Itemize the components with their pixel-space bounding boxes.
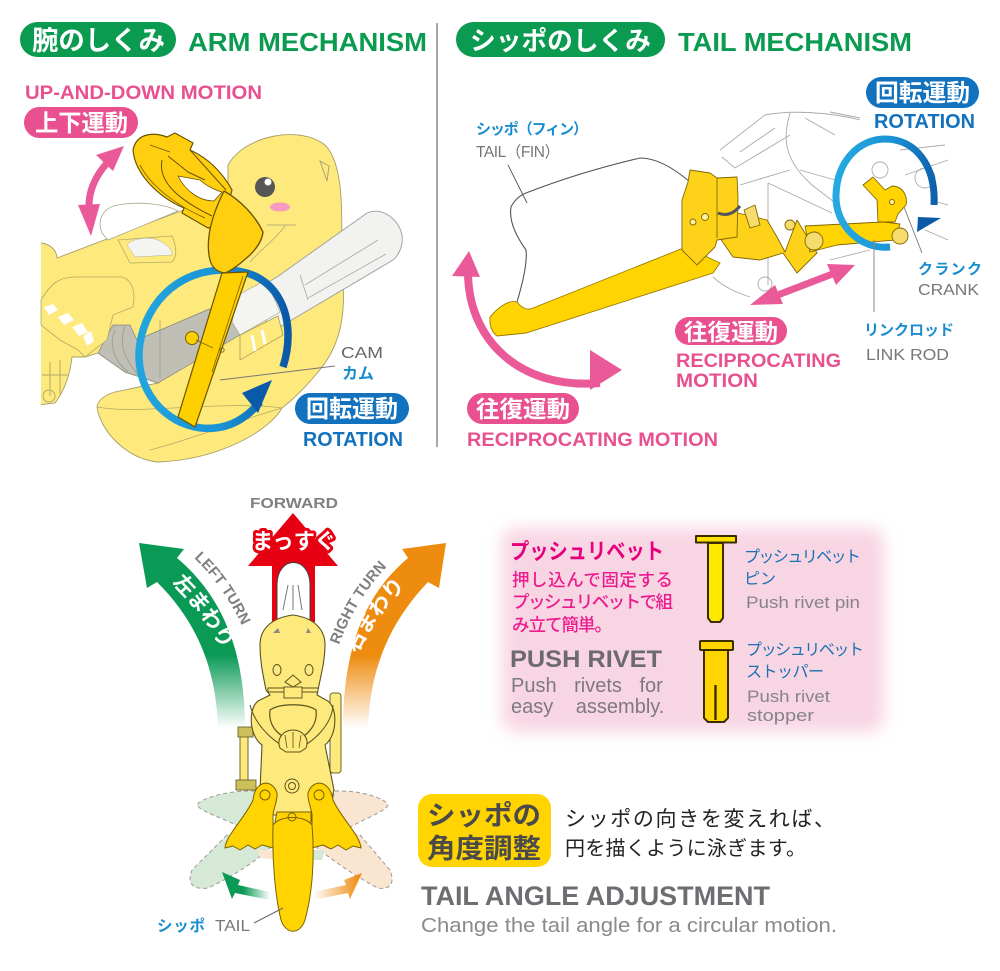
text: push rivet japanese: 押し込んで固定する	[512, 570, 673, 590]
label: crank: クランク	[918, 261, 982, 278]
text: push rivet japanese: プッシュリベットで組	[512, 592, 673, 612]
label: up and down motion	[24, 83, 262, 138]
arrow: tail left	[222, 872, 270, 900]
heading: arm mechanism: 腕のしくみ	[32, 26, 165, 56]
label: rotation: ROTATION	[874, 111, 975, 133]
arrow: forward: まっすぐ	[252, 529, 336, 554]
arrow: tail reciprocating motion	[452, 251, 622, 390]
label: rotation: 回転運動	[875, 80, 970, 107]
label: push rivet pin	[744, 548, 861, 612]
label: rotation	[295, 393, 409, 451]
label: tail fin	[476, 121, 588, 203]
panel: arm mechanism	[0, 22, 427, 462]
label: cam: カム	[342, 365, 374, 383]
label: tail: シッポ	[157, 917, 205, 935]
heading: arm mechanism	[20, 22, 427, 57]
panel: push rivet	[502, 528, 884, 732]
arrow: left turn: 左まわり	[173, 574, 232, 644]
icon: push rivet stopper	[700, 641, 733, 722]
arrow: left turn	[139, 543, 251, 726]
label: tail: TAIL	[215, 918, 250, 935]
panel: tail angle steering	[139, 496, 446, 935]
panel: tail mechanism	[452, 22, 982, 451]
arm mechanism: upper arm plate	[208, 191, 263, 273]
icon: eye	[255, 177, 275, 197]
arrow: forward	[248, 513, 338, 622]
arm mechanism: upper arm frame	[133, 133, 232, 228]
illustration: arm hand	[41, 277, 134, 402]
illustration: alternate fin positions	[190, 791, 392, 888]
label: link rod reciprocating motion: RECIPROCATING	[676, 351, 841, 372]
label: push rivet stopper: プッシュリベット	[746, 641, 864, 659]
arrow: right turn: 右まわり	[352, 580, 400, 652]
label: push rivet pin: プッシュリベット	[744, 548, 861, 566]
arrow: up and down motion	[78, 146, 124, 236]
arrow: crank rotation	[836, 139, 941, 247]
label: forward: FORWARD	[250, 496, 338, 512]
label: rotation	[866, 77, 979, 133]
label: fin reciprocating motion: RECIPROCATING MOTION	[467, 430, 718, 451]
arrow: left turn: LEFT TURN	[194, 551, 251, 625]
label: rotation: 回転運動	[306, 396, 398, 423]
label: cam: CAM	[341, 345, 383, 362]
text: push rivet japanese	[510, 539, 673, 635]
label: cam	[220, 345, 383, 383]
badge: tail angle adjustment: シッポの	[427, 801, 541, 831]
text: japanese description: シッポの向きを変えれば、	[565, 808, 835, 831]
heading: tail mechanism: TAIL MECHANISM	[678, 29, 912, 57]
label: fin reciprocating motion: 往復運動	[476, 396, 570, 422]
illustration: background body sketch	[713, 112, 948, 297]
label: tail fin: シッポ（フィン）	[476, 121, 588, 138]
label: tail	[157, 908, 283, 935]
label: crank: CRANK	[918, 282, 980, 299]
text: push rivet english	[510, 646, 664, 718]
label: push rivet pin: Push rivet pin	[746, 593, 860, 612]
label: fin reciprocating motion	[467, 393, 718, 451]
heading: arm mechanism: ARM MECHANISM	[188, 29, 427, 57]
badge: tail angle adjustment	[418, 794, 551, 867]
illustration: fins and tail	[225, 783, 361, 931]
heading: tail mechanism	[456, 22, 912, 57]
illustration: tail linkage	[682, 170, 908, 273]
text: push rivet japanese: プッシュリベット	[510, 539, 664, 564]
text: push rivet english: easy assembly.	[511, 696, 664, 718]
badge: tail angle adjustment: 角度調整	[427, 834, 541, 864]
text: english description: Change the tail angle for a circular motion.	[421, 914, 837, 937]
text: push rivet english: PUSH RIVET	[510, 646, 662, 673]
label: up and down motion: UP-AND-DOWN MOTION	[25, 83, 262, 104]
label: push rivet stopper	[746, 641, 864, 725]
label: link rod reciprocating motion: 往復運動	[684, 319, 778, 345]
icon: push rivet pin	[696, 536, 736, 622]
icon: cheek	[270, 202, 290, 212]
arm mechanism: cam	[178, 272, 248, 427]
label: push rivet stopper: stopper	[747, 706, 814, 725]
label: tail fin: TAIL（FIN）	[476, 144, 560, 161]
heading: tail mechanism: シッポのしくみ	[470, 26, 651, 56]
illustration: wing outline	[100, 203, 178, 240]
panel: tail angle adjustment	[418, 794, 837, 937]
arrow: right turn	[330, 543, 446, 726]
text: english description: TAIL ANGLE ADJUSTMENT	[421, 881, 770, 911]
label: link rod	[864, 240, 954, 364]
illustration: tail fin	[490, 158, 720, 336]
label: crank	[904, 207, 982, 299]
label: up and down motion: 上下運動	[35, 110, 128, 136]
label: link rod reciprocating motion	[675, 317, 841, 392]
text: push rivet english: Push rivets for	[511, 675, 663, 697]
arrow: right turn: RIGHT TURN	[330, 560, 386, 644]
label: push rivet stopper: ストッパー	[746, 664, 824, 681]
arrow: link rod reciprocating motion	[750, 264, 855, 305]
label: link rod: リンクロッド	[864, 322, 954, 339]
text: english description	[421, 881, 837, 937]
arrow: rotation	[139, 270, 288, 428]
illustration: mermaid character top view	[236, 615, 341, 815]
text: push rivet japanese: み立て簡単。	[512, 615, 612, 635]
label: push rivet pin: ピン	[744, 571, 776, 588]
label: push rivet stopper: Push rivet	[747, 687, 830, 706]
label: link rod reciprocating motion: MOTION	[676, 371, 758, 392]
text: japanese description	[565, 808, 835, 860]
illustration: mermaid character side view	[0, 135, 402, 462]
text: japanese description: 円を描くように泳ぎます。	[565, 837, 806, 860]
illustration: shell	[118, 236, 176, 263]
arrow: tail right	[313, 873, 362, 900]
label: link rod: LINK ROD	[866, 347, 949, 364]
label: rotation: ROTATION	[303, 429, 403, 451]
